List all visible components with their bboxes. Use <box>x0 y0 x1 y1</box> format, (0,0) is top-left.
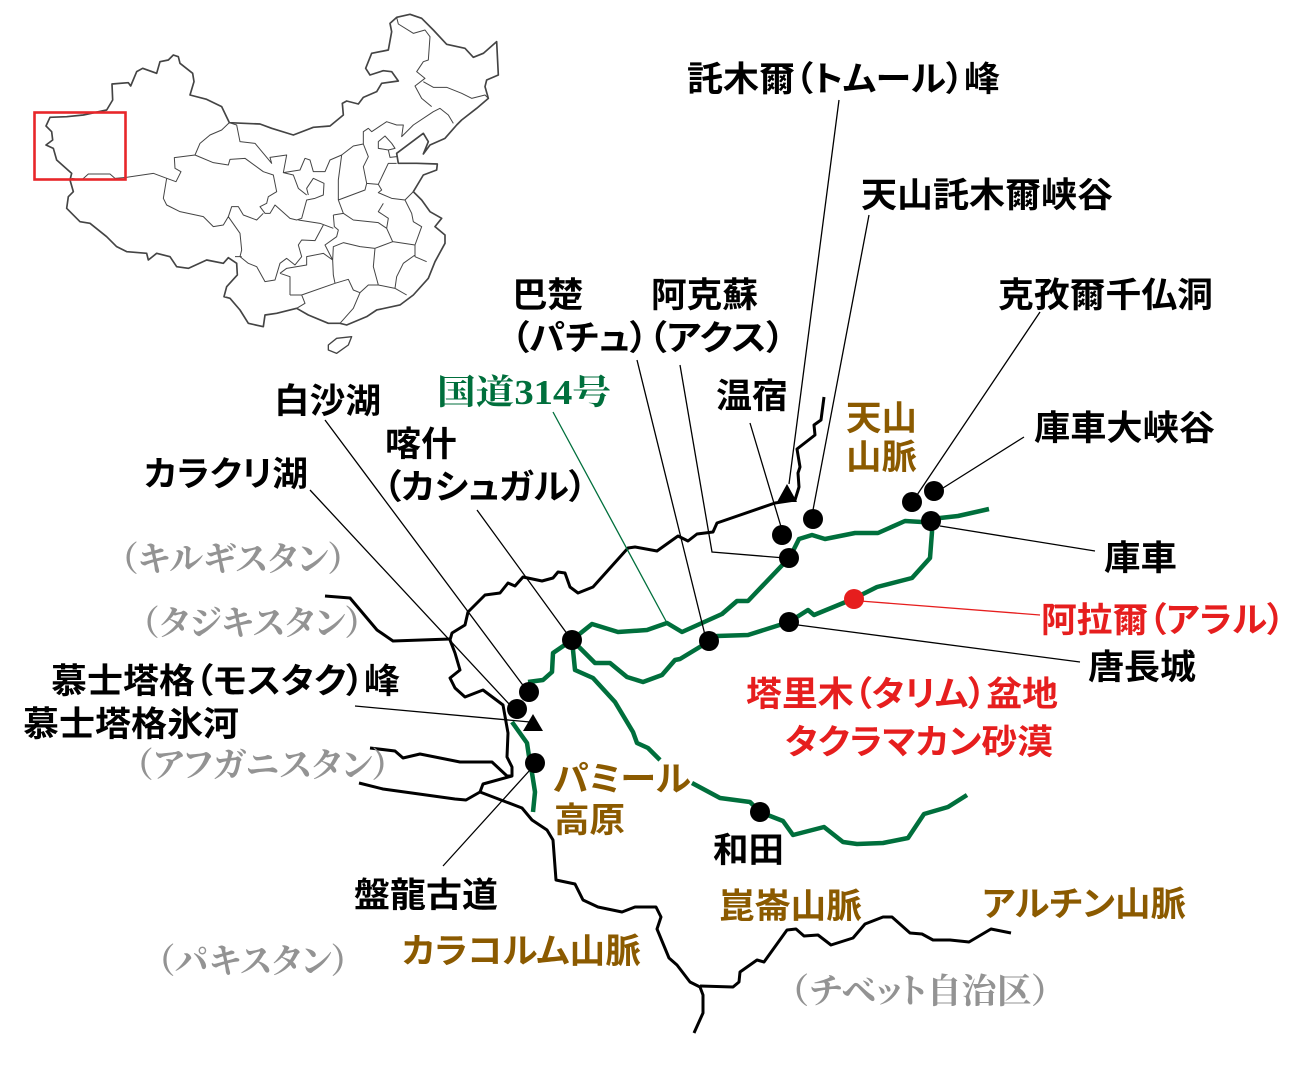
place labels: 温宿 <box>716 378 788 416</box>
mountain range labels: パミール <box>553 761 691 799</box>
place labels: （カシュガル） <box>383 469 587 507</box>
province boundaries <box>72 17 488 323</box>
mountain peak triangles <box>523 484 797 731</box>
red highlighted labels: 阿拉爾（アラル） <box>1041 602 1285 640</box>
mountain range labels: 天山 <box>846 400 917 438</box>
place labels: 託木爾（トムール）峰 <box>687 61 1001 99</box>
locator map of China <box>34 14 498 353</box>
national outline <box>46 14 498 327</box>
neighbouring country labels: （アフガニスタン） <box>136 747 389 785</box>
neighbouring country labels <box>121 541 1049 1011</box>
neighbouring country labels: （タジキスタン） <box>142 605 362 643</box>
red highlighted labels: 塔里木（タリム）盆地 <box>746 676 1058 714</box>
place labels: カラクリ湖 <box>144 456 308 494</box>
place labels: 庫車大峡谷 <box>1034 410 1215 448</box>
place labels <box>23 61 1215 915</box>
mountain range labels: アルチン山脈 <box>982 886 1186 924</box>
place labels: 阿克蘇 <box>651 277 758 315</box>
green roads: National Highway 314 <box>512 509 989 844</box>
locator red rectangle <box>34 112 126 180</box>
place labels: 白沙湖 <box>274 383 381 421</box>
place labels: 克孜爾千仏洞 <box>998 277 1213 315</box>
place labels: 唐長城 <box>1088 649 1196 687</box>
mountain range labels: 高原 <box>554 802 625 840</box>
place labels: 天山託木爾峡谷 <box>861 177 1113 215</box>
place labels: （パチュ） <box>511 320 648 358</box>
place labels: 喀什 <box>385 426 457 464</box>
highway label: 国道314号 <box>437 374 611 412</box>
place labels: 盤龍古道 <box>354 877 498 915</box>
mountain range labels <box>402 400 1186 971</box>
leader lines <box>310 100 1095 866</box>
red highlighted labels <box>746 602 1285 762</box>
national and regional borders <box>325 397 1011 1033</box>
place markers <box>507 481 944 822</box>
mountain range labels: 山脈 <box>846 439 917 477</box>
neighbouring country labels: （キルギスタン） <box>121 541 345 579</box>
neighbouring country labels: （チベット自治区） <box>791 973 1049 1011</box>
mountain range labels: 崑崙山脈 <box>719 888 862 926</box>
red highlighted labels: タクラマカン砂漠 <box>785 724 1053 762</box>
mountain range labels: カラコルム山脈 <box>402 933 641 971</box>
place labels: （アクス） <box>648 320 785 358</box>
place labels: 慕士塔格（モスタク）峰 <box>51 663 401 701</box>
place labels: 慕士塔格氷河 <box>23 706 239 744</box>
place labels: 和田 <box>713 832 784 870</box>
Hainan island <box>328 337 352 353</box>
place labels: 庫車 <box>1104 540 1177 578</box>
place labels: 巴楚 <box>512 277 583 315</box>
neighbouring country labels: （パキスタン） <box>158 943 348 981</box>
